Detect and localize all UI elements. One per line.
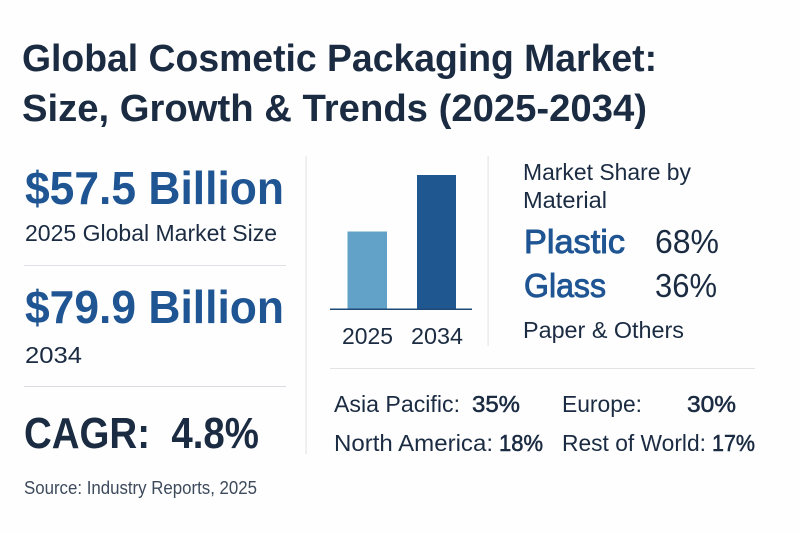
stat: 2034 market size: $79.9 Billion	[25, 281, 284, 333]
region: North America: North America:	[334, 430, 493, 456]
stat: 2025 market size	[25, 162, 284, 246]
source note: Source: Industry Reports, 2025	[24, 478, 257, 498]
heading: Market Share by	[523, 159, 691, 185]
stat: 2034 market size: 2034	[25, 342, 82, 368]
axis label: 2034: 2034	[411, 323, 463, 349]
row: plastic: 68%	[655, 223, 719, 260]
region: North America: 18%	[499, 430, 543, 456]
row: paper and others: Paper & Others	[523, 317, 684, 343]
title	[22, 38, 657, 130]
panel: market share by material	[523, 159, 719, 343]
region: Europe: 30%	[687, 391, 736, 417]
region: Rest of World: Rest of World:	[562, 430, 706, 456]
bar: 2034	[417, 175, 456, 308]
heading: Material	[523, 187, 607, 213]
region: Rest of World: 17%	[712, 430, 755, 456]
bar: 2025	[348, 232, 387, 308]
row: plastic: Plastic	[524, 223, 625, 260]
stat: 2034 market size	[25, 281, 284, 368]
region: Asia Pacific: 35%	[472, 391, 520, 417]
row: glass: Glass	[524, 267, 606, 304]
region: Europe: Europe:	[562, 391, 642, 417]
row: plastic	[524, 223, 719, 260]
title: Global Cosmetic Packaging Market:	[22, 38, 657, 80]
stat: 2025 market size: 2025 Global Market Size	[25, 220, 277, 246]
region: Asia Pacific: Asia Pacific:	[334, 391, 460, 417]
panel: regional share	[334, 391, 755, 456]
bar chart: market size 2025 vs 2034	[330, 175, 472, 349]
axis label: 2025: 2025	[342, 323, 393, 349]
row: glass: 36%	[655, 267, 717, 304]
region: Asia Pacific	[334, 391, 520, 417]
row: glass	[524, 267, 717, 304]
heading	[523, 159, 691, 213]
title: Size, Growth & Trends (2025-2034)	[22, 88, 647, 130]
panel: key figures	[24, 162, 286, 458]
stat: 2025 market size: $57.5 Billion	[25, 162, 284, 214]
region: Europe	[562, 391, 736, 417]
stat: CAGR: CAGR: 4.8%	[24, 409, 259, 458]
